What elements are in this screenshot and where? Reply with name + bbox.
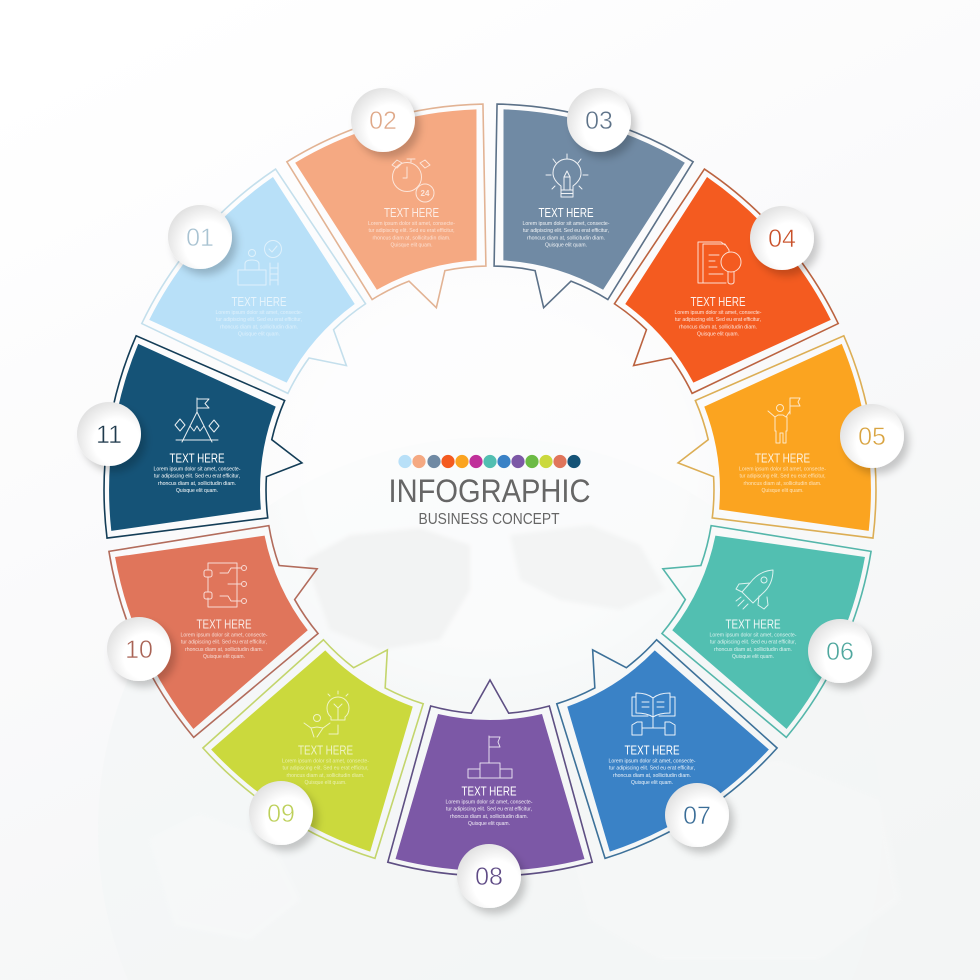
icon: documents and magnifier <box>698 242 741 284</box>
heading 05: TEXT HERE <box>755 452 810 466</box>
body text 10: Lorem ipsum dolor sit amet, consecte- <box>180 632 268 638</box>
panel shape 08 <box>388 680 592 876</box>
body text 07: tur adipiscing elit. Sed eu erat efficitur, <box>609 766 695 772</box>
body text 04: Quisque elit quam. <box>697 332 739 338</box>
panel shape 10 <box>96 476 359 743</box>
body text 02: tur adipiscing elit. Sed eu erat efficitur, <box>368 228 455 234</box>
number badge 02: 02 <box>369 107 397 135</box>
panel: step 08 <box>388 680 592 908</box>
icon: desk, ladder and check <box>238 240 282 285</box>
body text 05: Lorem ipsum dolor sit amet, consecte- <box>739 466 826 472</box>
body text 09 <box>282 758 369 786</box>
body text 09: Quisque elit quam. <box>304 780 347 786</box>
body text 01: tur adipiscing elit. Sed eu erat efficitur, <box>216 317 302 323</box>
panel shape 09 <box>195 595 473 870</box>
color dots row <box>398 455 581 468</box>
body text 02: Lorem ipsum dolor sit amet, consecte- <box>368 221 455 227</box>
number badge 07: 07 <box>683 802 711 830</box>
icon: flow diagram <box>204 563 246 607</box>
panel: step 07 <box>507 595 785 870</box>
body text 09: tur adipiscing elit. Sed eu erat efficitur, <box>282 766 369 772</box>
heading 08: TEXT HERE <box>462 784 516 798</box>
body text 04: rhoncus diam at, sollicitudin diam. <box>679 324 757 330</box>
body text 05: Quisque elit quam. <box>762 488 804 494</box>
panel shape 06 <box>621 476 884 743</box>
number badge 06 <box>808 619 872 683</box>
body text 11: Lorem ipsum dolor sit amet, consecte- <box>154 466 241 472</box>
body text 06: Lorem ipsum dolor sit amet, consecte- <box>710 632 797 638</box>
number badge 09 <box>249 781 313 845</box>
number badge 06: 06 <box>826 638 854 666</box>
panel: step 05 <box>663 334 904 564</box>
heading 04: TEXT HERE <box>690 295 746 309</box>
heading 06: TEXT HERE <box>726 618 780 632</box>
body text 10: tur adipiscing elit. Sed eu erat efficitur, <box>181 640 267 646</box>
body text 11: rhoncus diam at, sollicitudin diam. <box>158 481 236 487</box>
number badge 08 <box>457 844 521 908</box>
body text 06: rhoncus diam at, sollicitudin diam. <box>714 647 792 653</box>
body text 11: tur adipiscing elit. Sed eu erat efficitur, <box>154 474 240 480</box>
number badge 01: 01 <box>186 224 214 252</box>
panel shape 05 <box>663 334 887 564</box>
number badge 03 <box>567 88 631 152</box>
number badge 05 <box>840 404 904 468</box>
panel shape 04 <box>567 160 849 443</box>
number badge 11: 11 <box>96 421 122 449</box>
number badge 05: 05 <box>858 423 886 451</box>
body text 10 <box>180 632 268 660</box>
number badge 10: 10 <box>125 636 153 664</box>
panel shape 01 <box>131 160 413 443</box>
body text 09: Lorem ipsum dolor sit amet, consecte- <box>282 758 369 764</box>
panel: step 01 <box>131 160 413 443</box>
body text 08: tur adipiscing elit. Sed eu erat efficitur, <box>446 807 532 813</box>
panel: step 03 <box>446 88 697 337</box>
body text 10: Quisque elit quam. <box>203 654 245 660</box>
number badge 01 <box>168 205 232 269</box>
body text 01: Quisque elit quam. <box>238 332 280 338</box>
body text 01: Lorem ipsum dolor sit amet, consecte- <box>216 310 303 316</box>
panel: step 09 <box>195 595 473 870</box>
panel: step 02 <box>283 88 534 337</box>
panel: step 10 <box>96 476 359 743</box>
number badge 08: 08 <box>475 863 503 891</box>
heading 10: TEXT HERE <box>196 618 252 632</box>
icon: alarm clock 24 <box>392 159 434 202</box>
panel shape 11 <box>93 334 317 564</box>
icon: open book and hands <box>632 693 675 735</box>
panel shape 07 <box>507 595 785 870</box>
heading 09: TEXT HERE <box>298 744 353 758</box>
panel shape 03 <box>446 91 697 337</box>
body text 07: rhoncus diam at, sollicitudin diam. <box>613 773 691 779</box>
number badge 04: 04 <box>768 225 796 253</box>
body text 05: rhoncus diam at, sollicitudin diam. <box>744 481 822 487</box>
body text 08: Lorem ipsum dolor sit amet, consecte- <box>446 800 533 806</box>
body text 08: Quisque elit quam. <box>468 821 510 827</box>
body text 08: rhoncus diam at, sollicitudin diam. <box>450 814 528 820</box>
panel shape 02 <box>283 91 534 337</box>
body text 10: rhoncus diam at, sollicitudin diam. <box>185 647 263 653</box>
subtitle: BUSINESS CONCEPT <box>418 511 560 528</box>
body text 05: tur adipiscing elit. Sed eu erat efficitur, <box>740 474 826 480</box>
body text 02: rhoncus diam at, sollicitudin diam. <box>372 235 451 241</box>
body text 01 <box>216 310 303 338</box>
number badge 04 <box>750 206 814 270</box>
body text 06 <box>710 632 797 660</box>
body text 04: Lorem ipsum dolor sit amet, consecte- <box>674 310 762 316</box>
icon: mountain with flag <box>175 398 219 442</box>
heading 03: TEXT HERE <box>538 206 594 220</box>
panel: step 04 <box>567 160 849 443</box>
body text 07 <box>608 758 696 786</box>
body text 03: Quisque elit quam. <box>545 243 587 249</box>
body text 07: Quisque elit quam. <box>631 780 673 786</box>
body text 02 <box>368 221 455 249</box>
body text 09: rhoncus diam at, sollicitudin diam. <box>286 773 365 779</box>
icon: person holding flag <box>768 398 800 443</box>
world map background <box>98 200 900 980</box>
icon: flag on podium <box>468 736 512 778</box>
heading 01: TEXT HERE <box>232 295 286 309</box>
body text 03: tur adipiscing elit. Sed eu erat efficitur, <box>523 228 609 234</box>
icon: person with idea bulb <box>304 691 349 737</box>
heading 02: TEXT HERE <box>384 206 439 220</box>
body text 06: tur adipiscing elit. Sed eu erat efficitur, <box>710 640 796 646</box>
body text 05 <box>739 466 826 494</box>
body text 11 <box>154 466 241 494</box>
heading 11: TEXT HERE <box>170 452 224 466</box>
body text 04: tur adipiscing elit. Sed eu erat efficitur, <box>675 317 761 323</box>
body text 03: Lorem ipsum dolor sit amet, consecte- <box>522 221 610 227</box>
icon: light bulb with pencil <box>546 154 588 197</box>
number badge 11 <box>77 402 141 466</box>
number badge 02 <box>351 88 415 152</box>
number badge 03: 03 <box>585 107 613 135</box>
center title block <box>388 455 590 528</box>
panel: step 06 <box>621 476 884 743</box>
body text 02: Quisque elit quam. <box>390 243 433 249</box>
body text 03 <box>522 221 610 249</box>
panel: step 11 <box>77 334 317 564</box>
number badge 09: 09 <box>267 800 295 828</box>
number badge 07 <box>665 783 729 847</box>
body text 07: Lorem ipsum dolor sit amet, consecte- <box>608 758 696 764</box>
body text 01: rhoncus diam at, sollicitudin diam. <box>220 324 298 330</box>
number badge 10 <box>107 617 171 681</box>
body text 11: Quisque elit quam. <box>176 488 218 494</box>
main title: INFOGRAPHIC <box>388 473 590 509</box>
icon: rocket <box>736 570 773 609</box>
icon: alarm clock 24: 24 <box>421 189 430 198</box>
body text 08 <box>446 800 533 827</box>
body text 04 <box>674 310 762 338</box>
heading 07: TEXT HERE <box>624 744 680 758</box>
body text 03: rhoncus diam at, sollicitudin diam. <box>527 235 605 241</box>
body text 06: Quisque elit quam. <box>732 654 774 660</box>
